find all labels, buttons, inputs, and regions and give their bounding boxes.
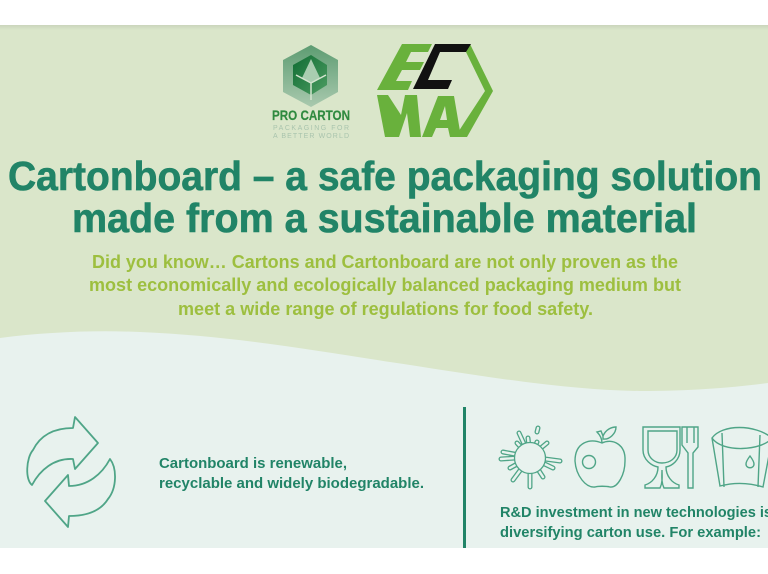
title (8, 153, 762, 241)
letter C (413, 44, 471, 89)
text: renewable: Cartonboard is renewable, (159, 456, 347, 472)
hexagon outline (455, 44, 493, 137)
text: renewable (159, 456, 424, 492)
icon: glass and fork (643, 427, 698, 488)
letter E (377, 44, 432, 90)
intro text (89, 252, 681, 319)
logo tagline: A BETTER WORLD (273, 133, 349, 140)
logo tagline: PACKAGING FOR (273, 125, 349, 132)
title: Cartonboard – a safe packaging solution (8, 153, 762, 199)
icon: recycling arrows (27, 417, 115, 527)
splash rays inner (501, 428, 560, 487)
intro text: Did you know… Cartons and Cartonboard are not only proven as the (92, 252, 678, 272)
intro text: meet a wide range of regulations for food safety. (178, 299, 593, 319)
top edge shadow (0, 25, 768, 30)
text: R&D investment: R&D investment in new technologies is (500, 505, 768, 521)
logo wordmark: PRO CARTON (272, 107, 350, 123)
letters MA (377, 95, 461, 137)
intro text: most economically and ecologically balanced packaging medium but (89, 275, 681, 295)
icon: apple (575, 427, 625, 487)
vertical divider (463, 407, 466, 548)
icon: carton with drop (712, 428, 768, 487)
panel: pale lower section with wave (0, 331, 768, 548)
text: R&D investment (500, 505, 768, 541)
splash rays outline (501, 428, 560, 487)
logo: Pro Carton (272, 45, 350, 140)
splash centre (514, 442, 546, 474)
text: renewable: recyclable and widely biodegradable. (159, 476, 424, 492)
icon: splash circle (501, 428, 560, 487)
logo: ECMA (377, 44, 493, 137)
icon: Pro Carton hexagon (283, 45, 338, 107)
title: made from a sustainable material (72, 195, 697, 241)
logo tagline (273, 125, 349, 140)
text: R&D investment: diversifying carton use. For example: (500, 525, 761, 541)
